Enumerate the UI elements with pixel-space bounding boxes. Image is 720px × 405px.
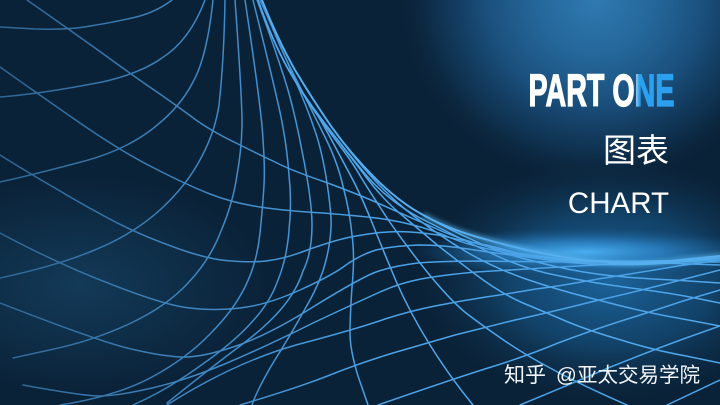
bright top edge of mesh [262, 0, 720, 264]
subtitle: 图表: 图表 [603, 132, 669, 169]
watermark: zhihu account: @ [556, 364, 577, 387]
watermark: zhihu account: 亚太交易学院 [577, 364, 700, 387]
subtitle: CHART: CHART [568, 187, 669, 220]
watermark: zhihu account: 知乎 [504, 364, 546, 387]
